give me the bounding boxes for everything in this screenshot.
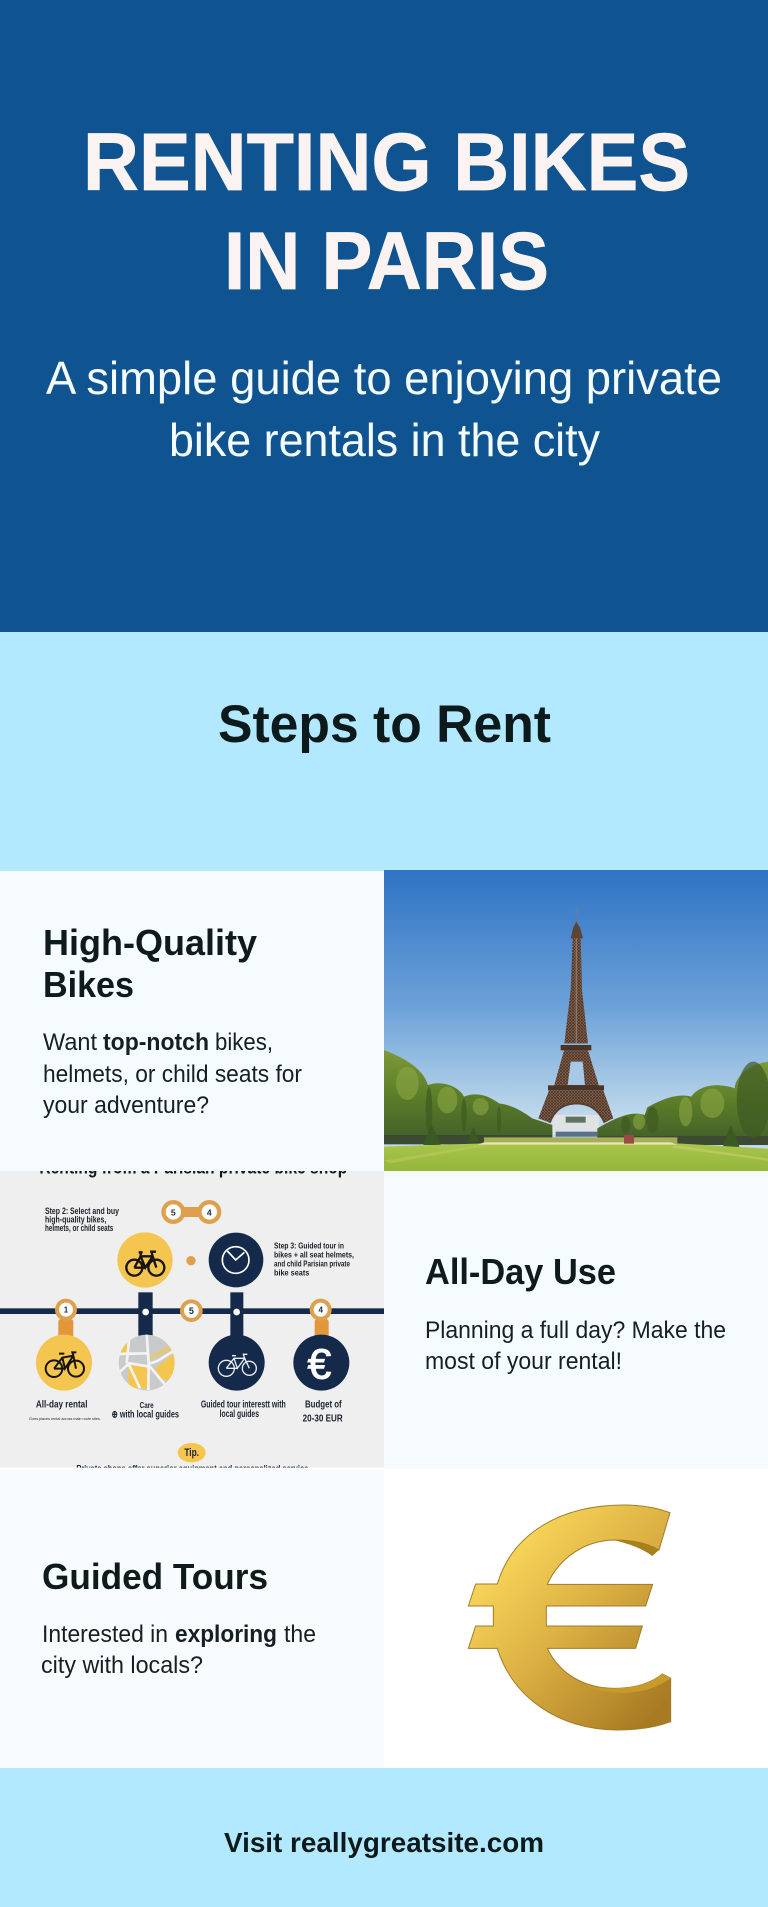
step 3 note: bikes + all seat helmets, bbox=[274, 1249, 354, 1259]
badge 4 bbox=[310, 1299, 332, 1338]
step labels: ⊕ with local guides bbox=[112, 1410, 179, 1421]
icon: map bbox=[117, 1333, 177, 1391]
panel: high-quality bikes bbox=[0, 871, 384, 1171]
step 2 note: helmets, or child seats bbox=[45, 1223, 113, 1233]
footer link text: Visit reallygreatsite.com bbox=[224, 1827, 544, 1858]
title bbox=[83, 117, 690, 307]
text: high-quality description: bikes, bbox=[215, 1029, 273, 1056]
text: high-quality description bbox=[43, 1029, 302, 1119]
text: high-quality description: your adventure? bbox=[43, 1092, 209, 1119]
heading: guided tours: Guided Tours bbox=[42, 1556, 268, 1597]
badge 4: 4 bbox=[318, 1306, 323, 1315]
step labels: 20-30 EUR bbox=[303, 1413, 343, 1424]
icon: bike on yellow circle bbox=[117, 1232, 173, 1288]
text: high-quality description: top-notch bbox=[103, 1029, 209, 1056]
panel: guided tours bbox=[0, 1469, 384, 1768]
step labels: Budget of bbox=[305, 1400, 342, 1411]
step labels: All-day rental bbox=[36, 1399, 88, 1410]
step 3 note: Step 3: Guided tour in bbox=[274, 1240, 344, 1250]
title: RENTING BIKES bbox=[83, 117, 690, 208]
step 2 note: high-quality bikes, bbox=[45, 1215, 106, 1225]
tip text: Private shops offer superior equipment and personalized service bbox=[76, 1463, 308, 1473]
title: IN PARIS bbox=[224, 216, 549, 307]
subtitle bbox=[46, 352, 722, 466]
icon: bike on yellow circle, all-day rental bbox=[36, 1335, 92, 1391]
step 3 note bbox=[274, 1242, 354, 1276]
chain link badge 5-4: 4 bbox=[207, 1207, 212, 1217]
decorative dot bbox=[186, 1256, 196, 1265]
step labels: Care bbox=[140, 1400, 154, 1410]
heading: all-day use: All-Day Use bbox=[425, 1251, 616, 1292]
icon: euro on navy circle bbox=[293, 1335, 349, 1391]
step 3 note: and child Parisian private bbox=[274, 1258, 350, 1268]
panel: steps heading band bbox=[0, 632, 768, 871]
panel: all-day use bbox=[384, 1171, 768, 1469]
chain link badge 5-4: 5 bbox=[171, 1207, 176, 1217]
text: guided tours description: exploring bbox=[175, 1621, 277, 1648]
panel: footer bbox=[0, 1768, 768, 1907]
lawn bbox=[384, 1135, 768, 1171]
icon: euro on navy circle: € bbox=[307, 1340, 331, 1388]
trees bbox=[384, 1050, 768, 1148]
badge 1 bbox=[55, 1299, 77, 1338]
text: guided tours description bbox=[41, 1621, 316, 1679]
step labels: Goes places rental across main route sites. bbox=[29, 1416, 101, 1421]
badge 1: 1 bbox=[64, 1306, 69, 1315]
image: eiffel tower bbox=[384, 870, 768, 1171]
heading: steps to rent: Steps to Rent bbox=[218, 695, 551, 754]
step labels: local guides bbox=[220, 1409, 259, 1420]
heading: high-quality bikes bbox=[43, 922, 257, 1005]
icon: clock bbox=[209, 1233, 263, 1287]
badge 5: 5 bbox=[189, 1306, 194, 1316]
step 3 note: bike seats bbox=[274, 1268, 309, 1278]
subtitle: A simple guide to enjoying private bbox=[46, 352, 722, 404]
text: high-quality description: helmets, or child seats for bbox=[43, 1061, 302, 1088]
infographic title: Renting from a Parisian private bike shop bbox=[39, 1158, 347, 1178]
step labels: Guided tour interestt with bbox=[201, 1400, 286, 1411]
infographic: renting from a parisian private bike shop bbox=[0, 1171, 384, 1468]
icon: bike on navy circle bbox=[209, 1335, 265, 1391]
panel: header bbox=[0, 0, 768, 632]
heading: high-quality bikes: Bikes bbox=[43, 964, 134, 1005]
panel: euro image bbox=[384, 1469, 768, 1768]
text: guided tours description: city with locals? bbox=[41, 1652, 203, 1679]
text: all-day description: most of your rental! bbox=[425, 1348, 622, 1375]
icon: gold euro symbol bbox=[468, 1505, 671, 1730]
chain link badge 5-4 bbox=[161, 1200, 221, 1224]
text: all-day description bbox=[425, 1317, 726, 1375]
tip badge bbox=[178, 1443, 206, 1462]
tip badge: Tip. bbox=[184, 1447, 199, 1459]
timeline bbox=[0, 1292, 384, 1337]
badge 5 bbox=[180, 1299, 203, 1322]
text: high-quality description: Want bbox=[43, 1029, 97, 1056]
tower bbox=[538, 907, 613, 1123]
step 2 note bbox=[45, 1206, 119, 1233]
step labels bbox=[29, 1400, 342, 1422]
step 2 note: Step 2: Select and buy bbox=[45, 1206, 119, 1216]
text: all-day description: Planning a full day? Make the bbox=[425, 1317, 726, 1344]
subtitle: bike rentals in the city bbox=[169, 414, 600, 466]
text: guided tours description: Interested in bbox=[42, 1621, 168, 1648]
heading: high-quality bikes: High-Quality bbox=[43, 922, 257, 963]
text: guided tours description: the bbox=[284, 1621, 316, 1648]
